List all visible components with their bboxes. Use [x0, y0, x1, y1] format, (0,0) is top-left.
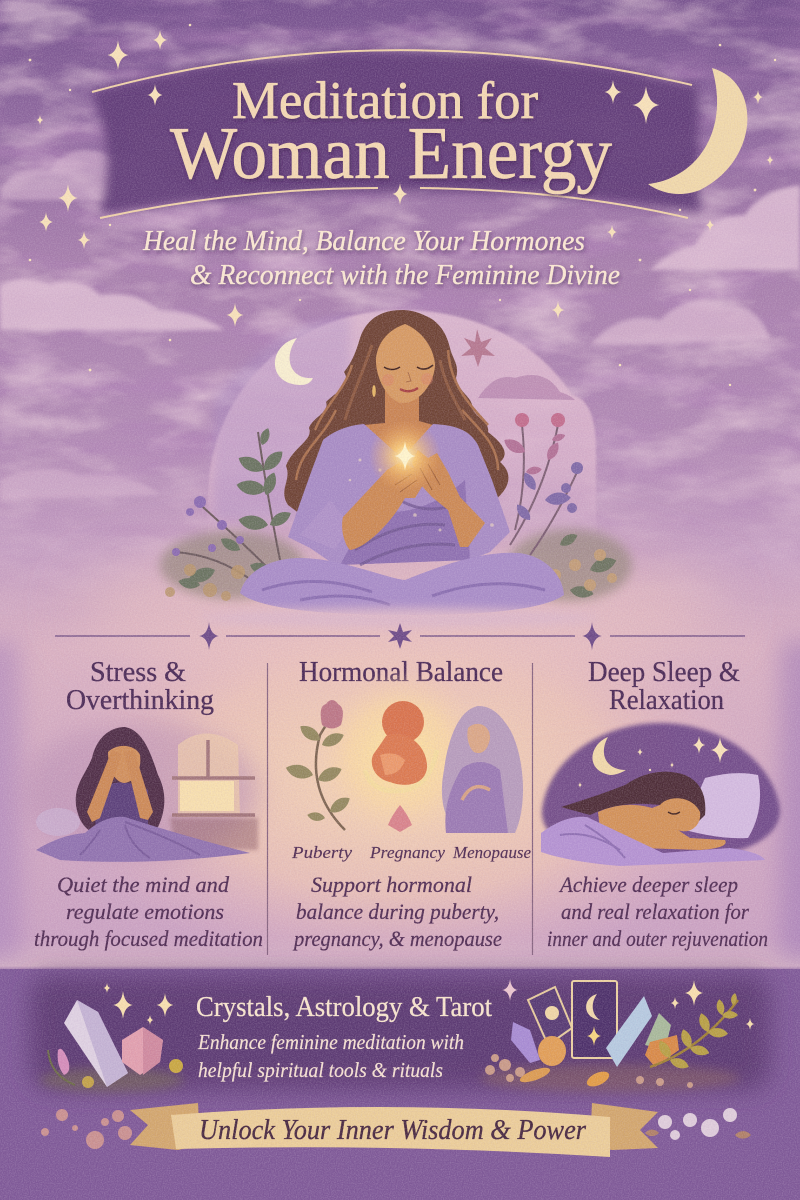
arms — [87, 750, 153, 822]
description — [197, 1030, 464, 1082]
heading: Stress & — [90, 656, 186, 688]
illustration: stressed woman in bed — [22, 722, 258, 862]
description — [547, 872, 768, 951]
icon: crescent moon — [648, 68, 747, 194]
rose — [316, 715, 345, 830]
title banner — [92, 50, 700, 218]
title — [170, 72, 612, 195]
stars — [104, 979, 754, 1030]
description: pregnancy, & menopause — [292, 926, 502, 951]
flowers — [41, 1108, 751, 1149]
heading — [588, 656, 740, 716]
robe — [288, 424, 510, 565]
heading: Overthinking — [66, 684, 214, 716]
legs — [240, 553, 564, 615]
title: Meditation for — [232, 72, 538, 130]
plants right — [501, 413, 632, 601]
description: Achieve deeper sleep — [558, 872, 738, 897]
hair — [561, 772, 705, 825]
window — [178, 734, 240, 817]
pillow — [36, 808, 80, 836]
description: Quiet the mind and — [57, 872, 230, 897]
stage labels: Menopause — [452, 843, 531, 862]
description: helpful spiritual tools & rituals — [198, 1058, 443, 1082]
panel: crystals astrology tarot — [0, 969, 800, 1200]
body — [95, 782, 148, 830]
blanket — [541, 817, 765, 866]
panel: deep sleep and relaxation — [541, 656, 780, 951]
ribbon banner — [130, 1103, 658, 1157]
illustration: sleeping woman — [541, 723, 780, 866]
panel: hormonal balance — [284, 656, 531, 951]
title: Woman Energy — [170, 113, 612, 195]
subtitle — [142, 226, 620, 291]
description — [34, 872, 263, 951]
heading: Relaxation — [609, 684, 724, 716]
arch — [208, 310, 596, 570]
small moon and star — [275, 338, 313, 385]
vertical dividers — [268, 663, 532, 955]
arms and hands — [342, 450, 485, 550]
mature woman — [442, 706, 523, 833]
description: through focused meditation — [34, 926, 263, 951]
skin — [598, 798, 726, 850]
clouds — [0, 150, 800, 500]
fleur — [388, 805, 412, 832]
description: and real relaxation for — [561, 899, 749, 924]
heading: Deep Sleep & — [588, 656, 740, 688]
description — [292, 872, 502, 951]
icon: left crystals — [40, 1000, 184, 1092]
heading: Crystals, Astrology & Tarot — [196, 992, 492, 1023]
divider with stars — [55, 622, 745, 650]
subtitle: & Reconnect with the Feminine Divine — [190, 260, 620, 291]
subtitle: Heal the Mind, Balance Your Hormones — [142, 226, 585, 257]
illustration: life stages — [284, 670, 523, 840]
description: regulate emotions — [66, 899, 224, 924]
blanket — [36, 817, 250, 862]
hair — [284, 310, 508, 514]
plants left — [160, 427, 304, 601]
heading — [66, 656, 214, 716]
heart glow — [369, 420, 441, 492]
fetus — [365, 750, 437, 791]
stage labels — [291, 843, 531, 862]
slogan: Unlock Your Inner Wisdom & Power — [199, 1115, 586, 1146]
hero illustration: meditating woman — [160, 310, 632, 628]
face and neck — [364, 390, 433, 458]
stage labels: Puberty — [291, 843, 352, 862]
heading: Hormonal Balance — [299, 656, 503, 688]
description: inner and outer rejuvenation — [547, 926, 768, 951]
description: Support hormonal — [311, 872, 472, 897]
face — [108, 746, 140, 783]
hair — [76, 727, 164, 833]
panel: stress and overthinking — [22, 656, 263, 951]
stars — [29, 24, 776, 386]
description: Enhance feminine meditation with — [197, 1030, 464, 1054]
pillow — [668, 773, 760, 838]
description: balance during puberty, — [296, 899, 499, 924]
icon: right tarot and crystals — [480, 981, 740, 1092]
stage labels: Pregnancy — [369, 843, 445, 862]
